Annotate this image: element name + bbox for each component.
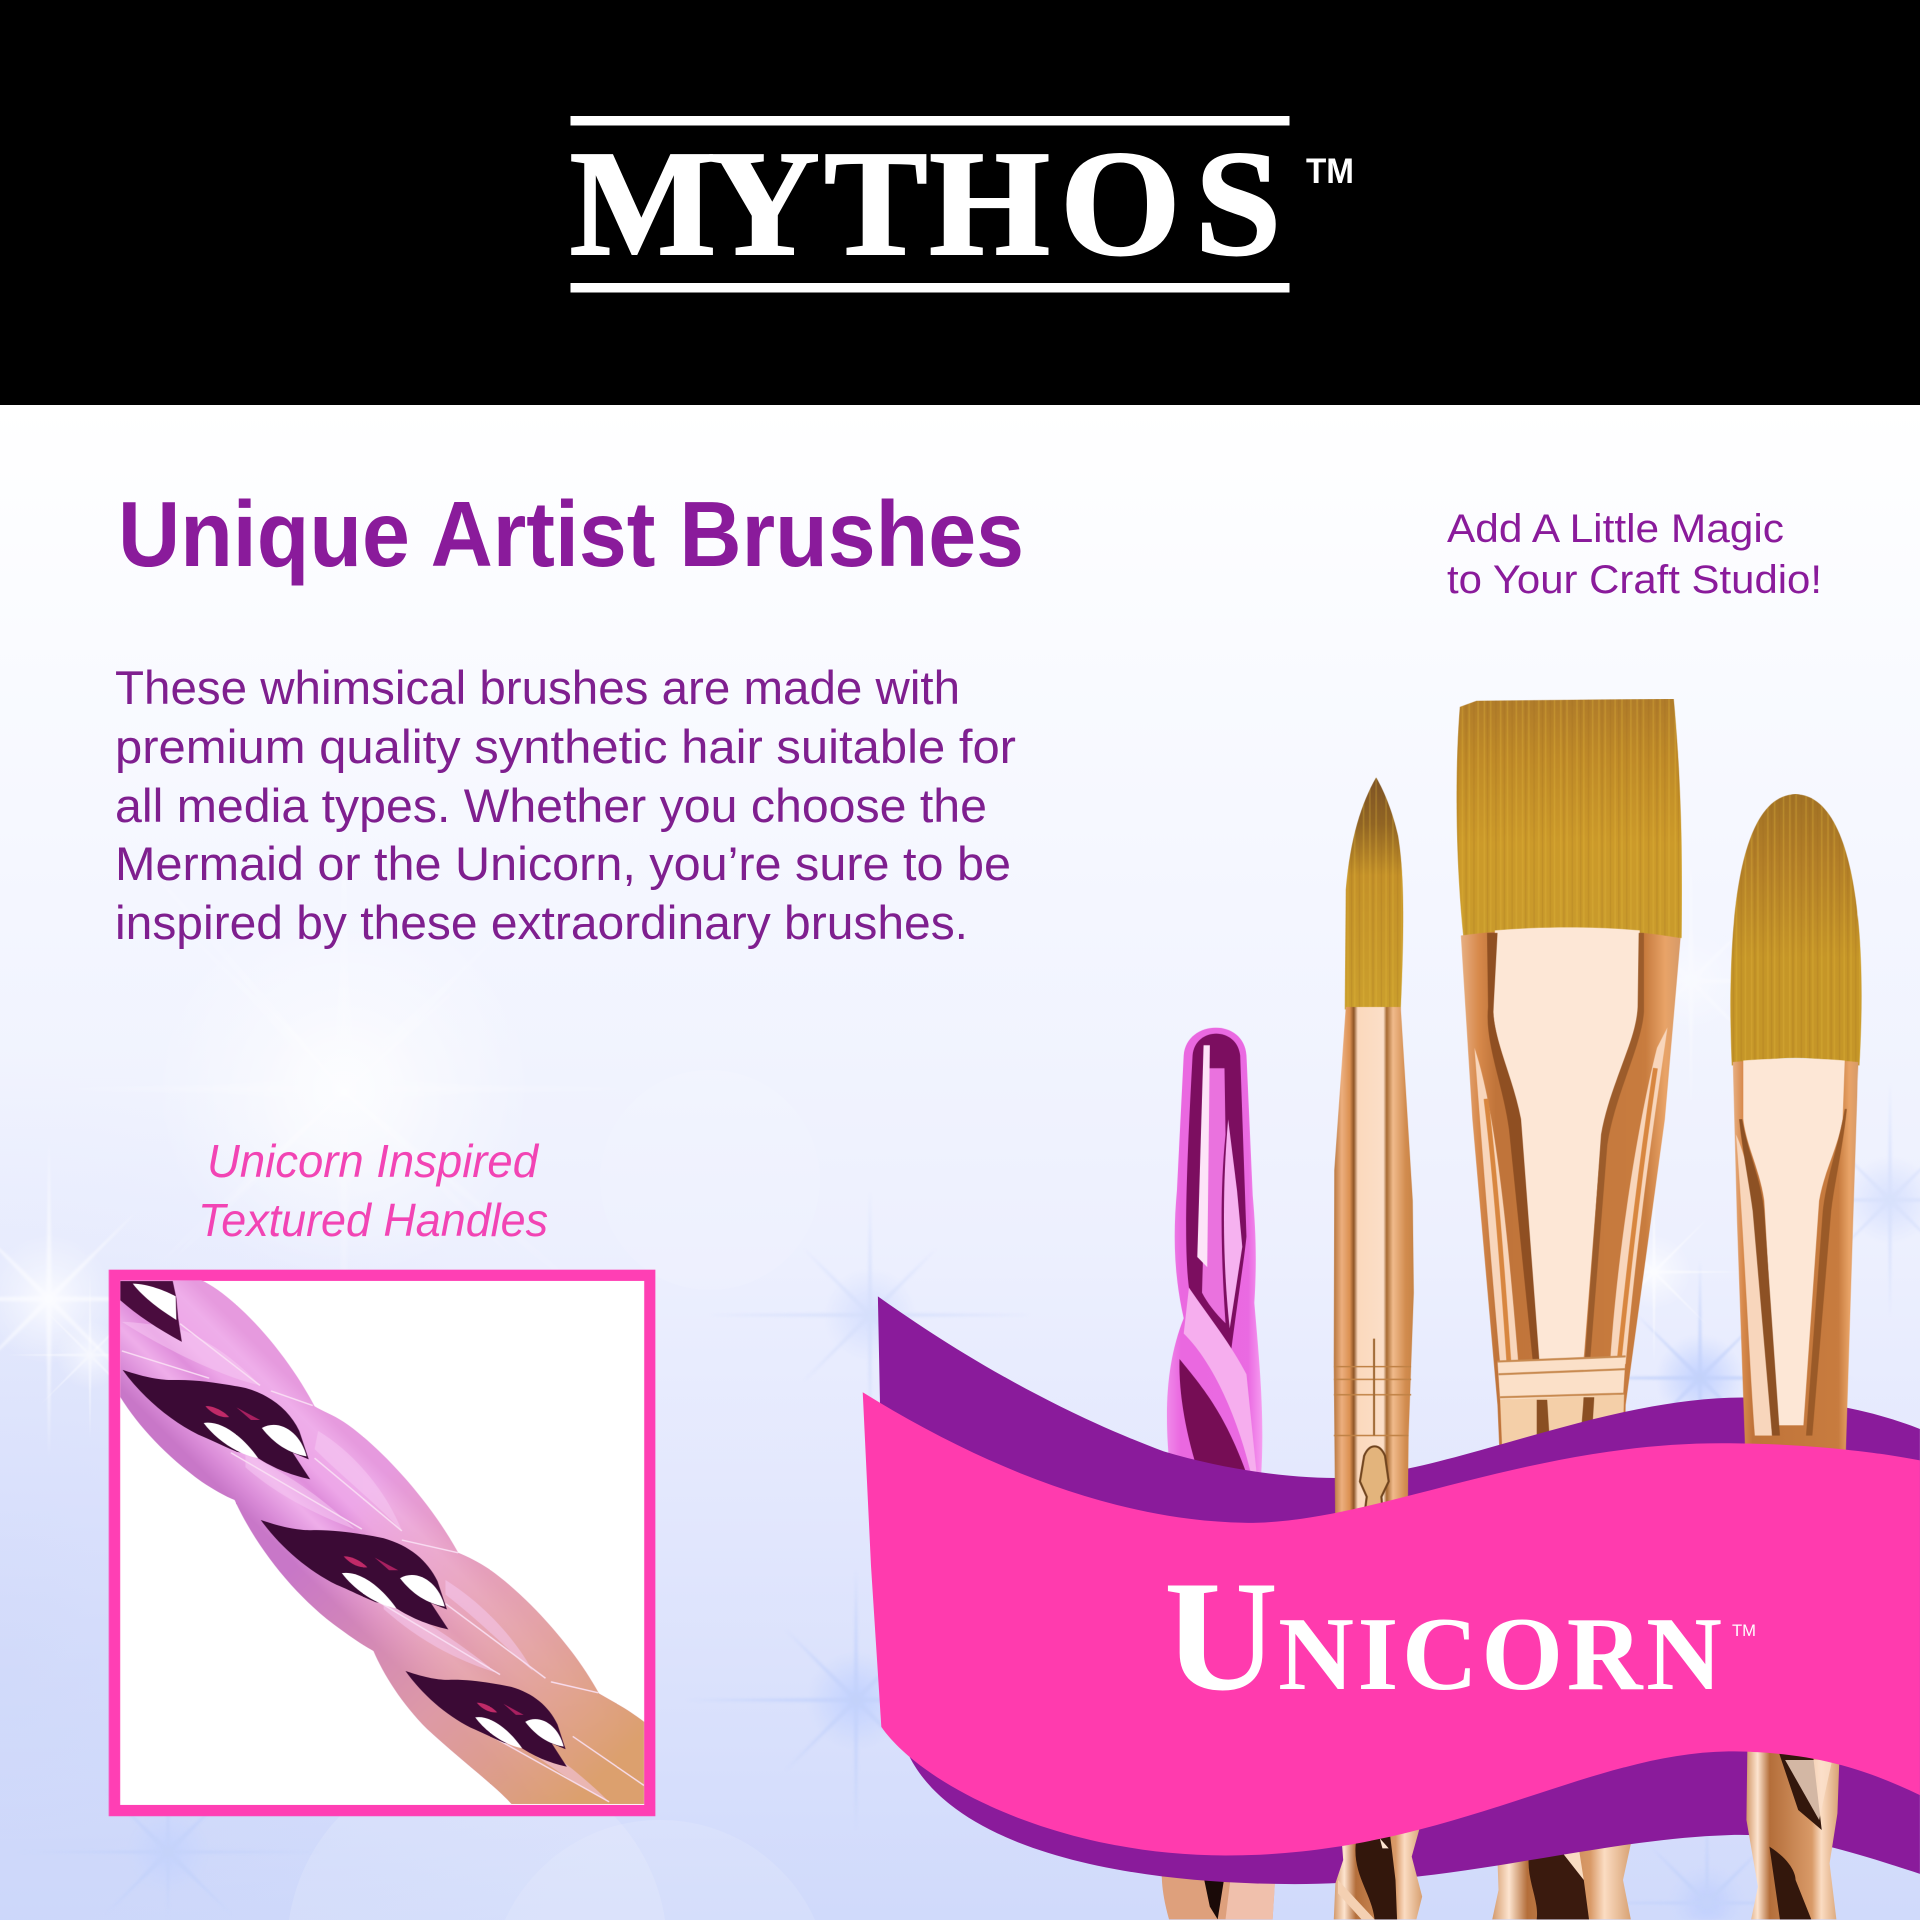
ribbon: purple back layer <box>878 1296 1920 1884</box>
background panel <box>0 405 1920 1920</box>
dark reflection: second <box>261 1520 448 1629</box>
tagline: to Your Craft Studio! <box>1447 558 1822 602</box>
brush: flat wash <box>1457 699 1682 1527</box>
inset caption: Textured Handles <box>198 1194 548 1246</box>
body copy: inspired by these extraordinary brushes. <box>115 896 968 949</box>
twisted handle <box>115 1275 653 1813</box>
white highlight: upper <box>133 1284 176 1320</box>
dark reflection: upper <box>120 1281 182 1342</box>
bristles <box>1345 777 1403 1009</box>
body copy: Mermaid or the Unicorn, you’re sure to be <box>115 837 1011 890</box>
body copy: all media types. Whether you choose the <box>115 779 987 832</box>
bristles <box>1731 794 1862 1066</box>
inset caption: Unicorn Inspired <box>207 1135 539 1187</box>
brush: filbert <box>1731 794 1862 1487</box>
body copy: premium quality synthetic hair suitable for <box>115 720 1016 773</box>
ferrule <box>1461 927 1681 1527</box>
body copy <box>115 661 1016 949</box>
logo: Mythos: MYTHOS <box>570 120 1281 287</box>
dark reflection: first <box>123 1370 310 1479</box>
lower handles behind ribbon <box>1162 1837 1632 1919</box>
tagline <box>1447 507 1822 602</box>
heading: Unique Artist Brushes <box>118 482 1024 586</box>
ferrule <box>1733 1059 1858 1487</box>
lower handles in front of purple <box>1334 1740 1840 1919</box>
handle: round brush <box>1334 1827 1422 1919</box>
dark reflection: third <box>405 1671 567 1767</box>
header band <box>0 0 1920 405</box>
brush: pointed round <box>1334 777 1414 1538</box>
handle: filbert <box>1746 1740 1840 1919</box>
ribbon title: Unicorn: UNICORN <box>1164 1549 1726 1724</box>
bristles <box>1457 699 1682 938</box>
body copy: These whimsical brushes are made with <box>115 661 960 714</box>
tagline: Add A Little Magic <box>1447 507 1784 551</box>
logo: Mythos: TM <box>1306 152 1354 191</box>
ribbon title: Unicorn: TM <box>1732 1621 1756 1640</box>
inset caption <box>198 1135 548 1246</box>
ribbon: pink front layer <box>863 1392 1920 1856</box>
brush: pink handle end <box>1167 1028 1262 1476</box>
ferrule <box>1334 1007 1414 1538</box>
inset panel: handle close-up <box>115 1275 653 1813</box>
